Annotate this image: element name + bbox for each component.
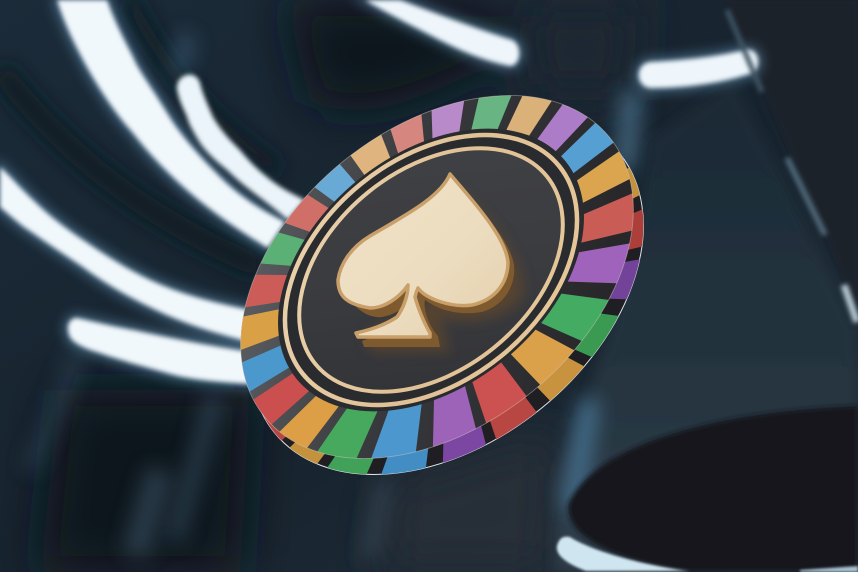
neon strip: bottom right end bbox=[800, 566, 858, 572]
background: dark curved bands bbox=[0, 0, 280, 268]
chip inner field bbox=[252, 99, 610, 441]
thin strip: right diagonal lower bbox=[787, 158, 825, 235]
thin strip: far right bbox=[844, 285, 857, 322]
spade extrusion bbox=[346, 181, 514, 347]
chip rim base bbox=[171, 21, 703, 533]
neon strip: left arc bbox=[0, 167, 250, 342]
gold ring: outer bbox=[233, 80, 629, 460]
neon strip: inner arc bbox=[177, 75, 305, 220]
thin strip: right diagonal upper bbox=[727, 10, 762, 92]
coloured rim segments bbox=[240, 96, 634, 458]
lamp cone dark opening bbox=[568, 406, 858, 572]
spade icon bbox=[338, 174, 514, 347]
neon strip: bottom right bbox=[557, 537, 690, 571]
background: lamp cone bbox=[555, 80, 858, 572]
neon strip: top centre bbox=[365, 0, 519, 66]
background: dark blurred shapes bbox=[40, 0, 640, 572]
background: blue column streaks bbox=[30, 35, 632, 558]
lamp cone blue glow bbox=[572, 400, 590, 510]
chip face edge highlight bbox=[171, 21, 703, 533]
spade shadow bbox=[365, 190, 523, 352]
spade face bbox=[338, 174, 508, 337]
neon strip: top right bbox=[639, 50, 758, 88]
chip side fill between faces bbox=[176, 29, 708, 541]
poker chip bbox=[240, 95, 644, 475]
background: upper right dark panel bbox=[726, 0, 858, 310]
neon strip: upper left arc bbox=[57, 0, 285, 248]
neon strip: lower left bbox=[68, 318, 250, 384]
neon strip glows bbox=[0, 0, 758, 384]
chip centre black disc bbox=[224, 71, 638, 469]
gold ring: inner bbox=[252, 99, 610, 441]
chip side coloured segments bbox=[263, 156, 644, 474]
chip side outline bbox=[181, 37, 713, 549]
